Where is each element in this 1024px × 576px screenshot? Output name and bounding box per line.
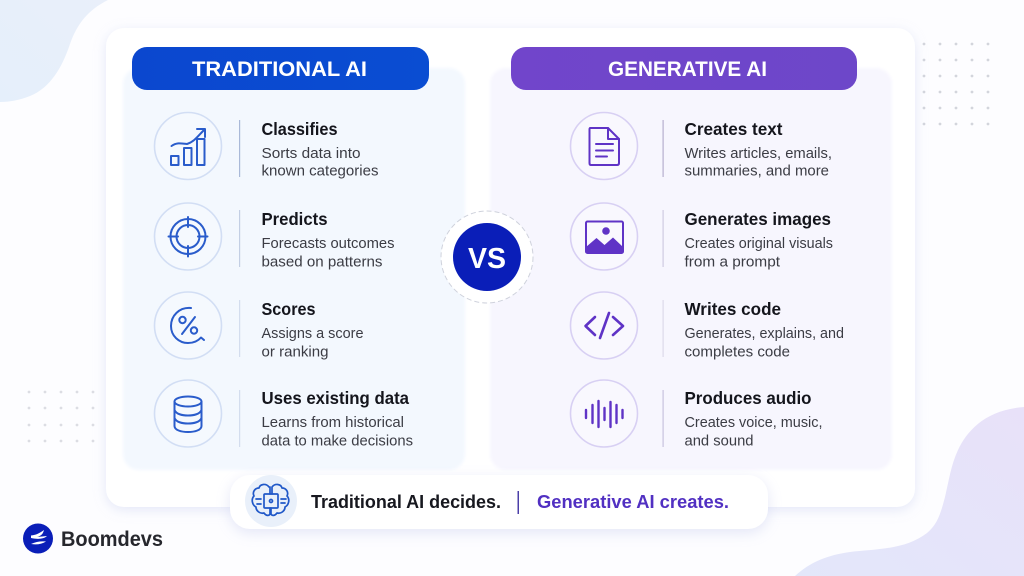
panel: traditional AI (123, 47, 465, 470)
icon: target (168, 217, 208, 256)
callout: summary bar: Traditional AI decides. (311, 491, 501, 512)
item: generates images: Generates images (684, 209, 831, 229)
item: writes code (570, 292, 844, 360)
item: predicts: Forecasts outcomes (262, 236, 394, 252)
item: uses existing data: Learns from historical (262, 415, 404, 431)
icon: growth chart (171, 129, 205, 165)
item: scores: or ranking (262, 344, 328, 360)
item: uses existing data: data to make decisions (262, 434, 413, 450)
main card (106, 28, 915, 507)
heading: traditional AI (132, 47, 429, 90)
panel background (490, 68, 892, 470)
item: produces audio (570, 380, 822, 450)
item: creates text (570, 112, 832, 180)
item: generates images (570, 203, 833, 270)
item: predicts: based on patterns (262, 254, 382, 270)
heading: traditional AI: TRADITIONAL AI (192, 58, 367, 81)
item: classifies: known categories (262, 164, 378, 180)
item: writes code: completes code (684, 344, 790, 360)
item: writes code: Generates, explains, and (684, 326, 844, 342)
dot grid: left (28, 391, 94, 442)
heading: generative AI (511, 47, 857, 90)
icon: AI brain (245, 475, 297, 527)
icon: percent gauge (171, 308, 204, 343)
dot grid: top right (923, 43, 989, 125)
VS badge (441, 211, 533, 303)
item: produces audio: Produces audio (684, 388, 812, 408)
icon: document (590, 128, 619, 165)
icon: sound wave (586, 401, 622, 427)
heading: generative AI: GENERATIVE AI (608, 58, 767, 81)
item: classifies: Sorts data into (262, 146, 360, 162)
item: generates images: from a prompt (684, 254, 780, 270)
panel: generative AI (490, 47, 892, 470)
item: uses existing data: Uses existing data (262, 388, 409, 408)
item: produces audio: and sound (684, 434, 754, 450)
icon: database (174, 396, 202, 432)
icon: code brackets (586, 313, 623, 338)
item: predicts: Predicts (262, 209, 328, 229)
VS badge: VS (468, 243, 506, 275)
item: classifies (154, 112, 378, 180)
logo: Boomdevs (23, 524, 163, 554)
panel background (123, 68, 465, 470)
callout: summary bar: Generative AI creates. (537, 491, 729, 512)
background blob: bottom right (795, 407, 1024, 576)
item: scores (154, 292, 364, 360)
background blob: top left (0, 0, 108, 102)
icon: picture (586, 222, 623, 253)
item: generates images: Creates original visuals (684, 236, 833, 252)
item: predicts (154, 203, 394, 270)
item: classifies: Classifies (262, 119, 338, 139)
item: scores: Scores (262, 299, 316, 319)
item: creates text: summaries, and more (684, 164, 829, 180)
item: writes code: Writes code (684, 299, 781, 319)
item: creates text: Writes articles, emails, (684, 146, 832, 162)
item: produces audio: Creates voice, music, (684, 415, 822, 431)
callout: summary bar (230, 475, 768, 529)
item: creates text: Creates text (684, 119, 783, 139)
item: uses existing data (154, 380, 413, 450)
item: scores: Assigns a score (262, 326, 364, 342)
logo: Boomdevs: Boomdevs (61, 528, 163, 551)
